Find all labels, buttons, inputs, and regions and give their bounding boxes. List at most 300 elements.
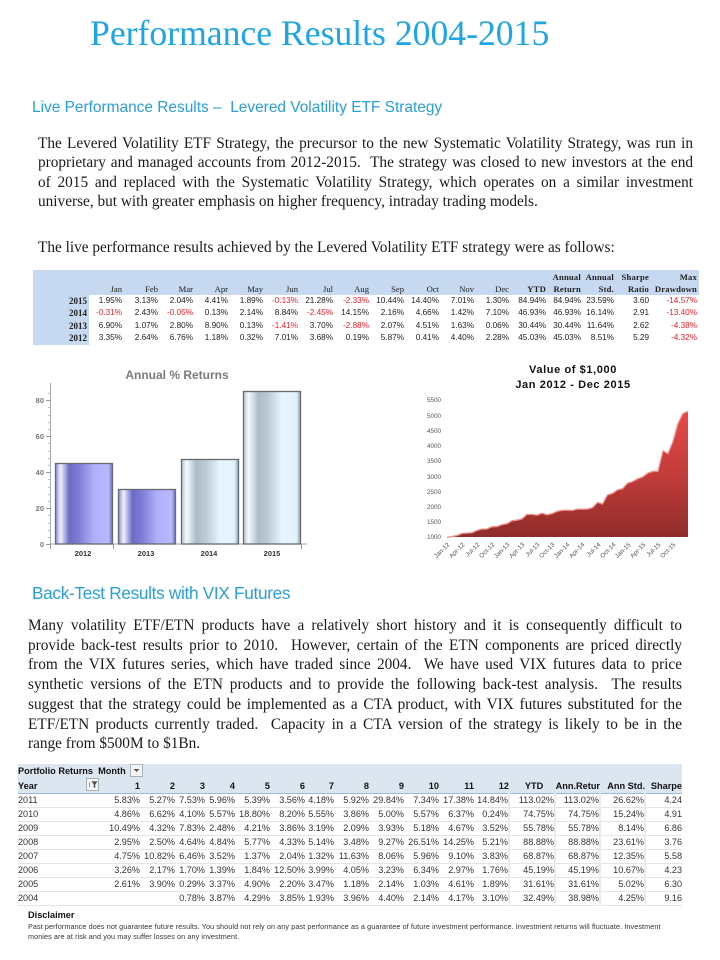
table: back-test portfolio returns: 2.17% xyxy=(149,865,175,875)
table: back-test portfolio returns: 7 xyxy=(329,780,334,790)
text block: strategy description: universe, but with greater emphasis on higher frequency, intraday trading models. xyxy=(38,193,538,210)
table: live monthly performance: 16.14% xyxy=(586,308,614,317)
table: back-test portfolio returns: Ann Std. xyxy=(607,780,645,790)
table: back-test portfolio returns: 8.20% xyxy=(279,809,305,819)
table: back-test portfolio returns: 7.53% xyxy=(179,795,205,805)
table: back-test portfolio returns: 7.34% xyxy=(413,795,439,805)
text block: back-test description: provide back-test results prior to 2010. However, certain of the ETN components are priced directly xyxy=(28,637,682,654)
table: back-test portfolio returns: 3.87% xyxy=(209,893,235,903)
table: back-test portfolio returns: 5.92% xyxy=(343,795,369,805)
text block: back-test description xyxy=(28,617,682,752)
table: back-test portfolio returns: 2 xyxy=(170,780,175,790)
table: back-test portfolio returns: 2008 xyxy=(18,837,38,847)
table: back-test portfolio returns: 6.46% xyxy=(179,851,205,861)
table: back-test portfolio returns: 3.23% xyxy=(378,865,404,875)
x-axis labels xyxy=(433,541,678,560)
table: back-test portfolio returns: 9.27% xyxy=(378,837,404,847)
x-axis labels: Jul-14 xyxy=(585,541,603,559)
table: back-test portfolio returns: 1.18% xyxy=(343,879,369,889)
text block: back-test description: synthetic versions of the ETN products and to provide the following back-test analysis. The results xyxy=(28,676,682,693)
table: live monthly performance: 2.91 xyxy=(633,308,649,317)
heading: live performance: Live Performance Results – Levered Volatility ETF Strategy xyxy=(32,99,442,116)
table: live monthly performance: -14.57% xyxy=(666,296,697,304)
table: back-test portfolio returns: 4.90% xyxy=(244,879,270,889)
table: back-test portfolio returns: 2005 xyxy=(18,879,38,889)
table: live monthly performance: 2013 xyxy=(69,321,87,331)
text block: back-test description: from the VIX futures series, which have traded since 2004. We have used VIX futures data to price xyxy=(28,656,682,673)
table: back-test portfolio returns: 38.98% xyxy=(568,893,599,903)
table: back-test portfolio returns: 6.30 xyxy=(664,879,682,889)
table: back-test portfolio returns: 6.62% xyxy=(149,809,175,819)
table: live monthly performance: YTD xyxy=(527,284,546,294)
x-axis labels: Jul-13 xyxy=(524,541,542,559)
table: back-test portfolio returns: 0.29% xyxy=(179,879,205,889)
table: back-test portfolio returns: 4.75% xyxy=(114,851,140,861)
table: back-test portfolio returns: 5.18% xyxy=(413,823,439,833)
y-axis labels xyxy=(427,397,441,541)
table: live monthly performance: Jan xyxy=(111,284,122,294)
table: back-test portfolio returns: 3.86% xyxy=(279,823,305,833)
table: back-test portfolio returns: 12 xyxy=(499,780,509,790)
table: back-test portfolio returns: 4.17% xyxy=(448,893,474,903)
y-axis labels xyxy=(36,396,44,549)
table: back-test portfolio returns: 3.19% xyxy=(308,823,334,833)
text block: strategy description: of 2015 and replaced with the Systematic Volatility Strategy, which operates on a similar investment xyxy=(38,174,693,191)
table: back-test portfolio returns: 3.48% xyxy=(343,837,369,847)
table: back-test portfolio returns: 10 xyxy=(429,780,439,790)
table: back-test portfolio returns: 3.47% xyxy=(308,879,334,889)
table: live monthly performance: 2012 xyxy=(69,333,87,343)
table: live monthly performance: Annual xyxy=(553,272,581,282)
x-axis labels: Jul-15 xyxy=(645,541,663,559)
table: live monthly performance: 2.04% xyxy=(170,296,193,304)
table: back-test portfolio returns: Sharpe xyxy=(651,780,682,790)
table: back-test portfolio returns: 10.49% xyxy=(109,823,140,833)
table: back-test portfolio returns: 2.04% xyxy=(279,851,305,861)
table: back-test portfolio returns: 5.57% xyxy=(209,809,235,819)
table: back-test portfolio returns: 8.06% xyxy=(378,851,404,861)
table: live monthly performance: 4.41% xyxy=(205,296,228,304)
table: live monthly performance xyxy=(33,270,699,345)
table: back-test portfolio returns: 5.00% xyxy=(378,809,404,819)
table: back-test portfolio returns: 3.86% xyxy=(343,809,369,819)
table: live monthly performance: Dec xyxy=(495,284,509,294)
table: back-test portfolio returns: 4.32% xyxy=(149,823,175,833)
table: back-test portfolio returns: 45.19% xyxy=(523,865,554,875)
table: live monthly performance: Jul xyxy=(323,284,333,294)
table: back-test portfolio returns: 74.75% xyxy=(568,809,599,819)
table: live monthly performance: Oct xyxy=(427,284,439,294)
table: back-test portfolio returns: 4.10% xyxy=(179,809,205,819)
table: back-test portfolio returns: 8 xyxy=(364,780,369,790)
table: live monthly performance: Sharpe xyxy=(622,272,649,282)
table: back-test portfolio returns: 3 xyxy=(200,780,205,790)
table: back-test portfolio returns: 3.52% xyxy=(209,851,235,861)
y-axis labels: 20 xyxy=(36,504,44,513)
table: back-test portfolio returns: 88.88% xyxy=(568,837,599,847)
text block: back-test description: suggest that the strategy could be implemented as a CTA product, with VIX futures substituted for the xyxy=(28,696,682,713)
table: live monthly performance: 6.90% xyxy=(99,321,122,330)
table: back-test portfolio returns: 3.96% xyxy=(343,893,369,903)
table: live monthly performance: 8.51% xyxy=(591,333,614,342)
table: back-test portfolio returns: 4.64% xyxy=(179,837,205,847)
icon: year filter button xyxy=(86,778,99,791)
x-axis labels: Apr-15 xyxy=(629,541,648,560)
table: live monthly performance: 45.03% xyxy=(553,333,581,342)
table: back-test portfolio returns: 2.09% xyxy=(343,823,369,833)
table: back-test portfolio returns: 2.14% xyxy=(378,879,404,889)
table: live monthly performance: 14.40% xyxy=(411,296,439,304)
table: live monthly performance: 4.66% xyxy=(416,308,439,317)
table: live monthly performance: Aug xyxy=(354,284,369,294)
table: live monthly performance: 23.59% xyxy=(586,296,614,304)
table: back-test portfolio returns: 3.83% xyxy=(482,851,508,861)
table: back-test portfolio returns: 9.16 xyxy=(664,893,682,903)
y-axis labels: 0 xyxy=(40,540,44,549)
axes xyxy=(46,383,307,549)
table: back-test portfolio returns: Year xyxy=(18,780,37,790)
table: live monthly performance: 1.63% xyxy=(451,321,474,330)
table: live monthly performance: 0.13% xyxy=(240,321,263,330)
table: live monthly performance: May xyxy=(247,284,263,294)
table: back-test portfolio returns: 2011 xyxy=(18,795,38,805)
table: back-test portfolio returns xyxy=(18,764,682,906)
table: back-test portfolio returns: 6.34% xyxy=(413,865,439,875)
x-axis labels: Apr-12 xyxy=(448,541,467,560)
bar chart: annual % returns xyxy=(36,368,307,558)
chart title xyxy=(515,364,631,391)
table: back-test portfolio returns: 3.76 xyxy=(664,837,682,847)
table: back-test portfolio returns: 7.83% xyxy=(179,823,205,833)
table: back-test portfolio returns: 4.29% xyxy=(244,893,270,903)
table: live monthly performance: Apr xyxy=(215,284,228,294)
table: back-test portfolio returns: 6 xyxy=(300,780,305,790)
table: live monthly performance: -2.33% xyxy=(343,296,369,304)
table: live monthly performance: 45.03% xyxy=(518,333,546,342)
table: back-test portfolio returns: 2.14% xyxy=(413,893,439,903)
x-axis labels: Oct-15 xyxy=(659,541,678,560)
table: back-test portfolio returns: 26.62% xyxy=(613,795,644,805)
table: live monthly performance: 2014 xyxy=(69,308,87,318)
table: live monthly performance: 2.43% xyxy=(135,308,158,317)
y-axis labels: 4500 xyxy=(427,428,441,435)
x-axis labels: Oct-12 xyxy=(478,541,497,560)
table: live monthly performance: Max xyxy=(680,272,697,282)
table: back-test portfolio returns: Portfolio Returns Month xyxy=(18,766,126,776)
table: back-test portfolio returns: 2009 xyxy=(18,823,38,833)
table: live monthly performance: 7.10% xyxy=(486,308,509,317)
table: live monthly performance: 2.16% xyxy=(381,308,404,317)
table: back-test portfolio returns: 1.89% xyxy=(482,879,508,889)
table: back-test portfolio returns: 113.02% xyxy=(519,795,554,805)
table: live monthly performance: 1.42% xyxy=(451,308,474,317)
title: Performance Results 2004-2015 xyxy=(90,13,549,53)
table: back-test portfolio returns: 12.50% xyxy=(274,865,305,875)
table: back-test portfolio returns: 32.49% xyxy=(523,893,554,903)
chart title: Value of $1,000 xyxy=(529,364,617,376)
table: back-test portfolio returns: 14.84% xyxy=(477,795,508,805)
table: back-test portfolio returns: 5 xyxy=(265,780,270,790)
text block: back-test description: range from $500M to $1Bn. xyxy=(28,735,200,752)
table: live monthly performance: 30.44% xyxy=(518,321,546,330)
x-axis labels: Oct-14 xyxy=(599,541,618,560)
table: live monthly performance: Sep xyxy=(391,284,404,294)
bars xyxy=(56,392,300,544)
table: live monthly performance: 1.18% xyxy=(205,333,228,342)
table: back-test portfolio returns: 5.39% xyxy=(244,795,270,805)
table: back-test portfolio returns: 6.86 xyxy=(664,823,682,833)
disclaimer: monies are at risk and you may suffer losses on any investment. xyxy=(28,932,239,941)
table: live monthly performance: 14.15% xyxy=(341,308,369,317)
table: back-test portfolio returns: 5.83% xyxy=(114,795,140,805)
table: live monthly performance: 7.01% xyxy=(451,296,474,304)
table: live monthly performance: 0.06% xyxy=(486,321,509,330)
table: live monthly performance: 2015 xyxy=(69,296,87,306)
x-axis labels: 2013 xyxy=(138,549,154,558)
table: back-test portfolio returns: 3.26% xyxy=(114,865,140,875)
table: live monthly performance: Feb xyxy=(145,284,158,294)
y-axis labels: 3000 xyxy=(427,474,441,481)
table: back-test portfolio returns: 1.84% xyxy=(244,865,270,875)
table: back-test portfolio returns: 45.19% xyxy=(568,865,599,875)
table: back-test portfolio returns: 4.23 xyxy=(664,865,682,875)
y-axis labels: 5500 xyxy=(427,397,441,404)
y-axis labels: 60 xyxy=(36,432,44,441)
table: back-test portfolio returns: 4.86% xyxy=(114,809,140,819)
table: live monthly performance: 0.19% xyxy=(346,333,369,342)
table: live monthly performance: -1.41% xyxy=(272,321,298,330)
table: back-test portfolio returns: 3.90% xyxy=(149,879,175,889)
table: back-test portfolio returns: YTD xyxy=(525,780,543,790)
table: back-test portfolio returns: 68.87% xyxy=(523,851,554,861)
table: back-test portfolio returns: 4.67% xyxy=(448,823,474,833)
table: live monthly performance: -4.38% xyxy=(671,321,697,330)
table: back-test portfolio returns: 2.97% xyxy=(448,865,474,875)
table: back-test portfolio returns: 4.24 xyxy=(664,795,682,805)
table: back-test portfolio returns: 3.10% xyxy=(482,893,508,903)
y-axis labels: 4000 xyxy=(427,443,441,450)
disclaimer: Past performance does not guarantee future results. You should not rely on any past performance as a guarantee of future investment performance. Investment returns will fluctuate. Investment xyxy=(28,922,661,931)
table: back-test portfolio returns: 5.96% xyxy=(413,851,439,861)
table: live monthly performance: 2.64% xyxy=(135,333,158,342)
table: live monthly performance: -0.31% xyxy=(96,308,122,317)
chart title: Annual % Returns xyxy=(125,368,229,382)
x-axis labels: 2014 xyxy=(201,549,218,558)
table: back-test portfolio returns: 4.40% xyxy=(378,893,404,903)
table: live monthly performance: 7.01% xyxy=(275,333,298,342)
table: live monthly performance: 1.95% xyxy=(99,296,122,304)
table: live monthly performance: 46.93% xyxy=(553,308,581,317)
table: back-test portfolio returns: 3.93% xyxy=(378,823,404,833)
table: back-test portfolio returns: 9.10% xyxy=(448,851,474,861)
heading: back-test results: Back-Test Results with VIX Futures xyxy=(32,583,290,603)
table: back-test portfolio returns: 2006 xyxy=(18,865,38,875)
x-axis labels: Jan-13 xyxy=(493,541,512,560)
x-axis labels: Oct-13 xyxy=(538,541,557,560)
table: back-test portfolio returns: 4 xyxy=(230,780,235,790)
table: back-test portfolio returns: 10.82% xyxy=(144,851,175,861)
table: live monthly performance: 2.80% xyxy=(170,321,193,330)
table: back-test portfolio returns: 3.85% xyxy=(279,893,305,903)
table: live monthly performance: 2.28% xyxy=(486,333,509,342)
value area xyxy=(447,411,688,538)
table: live monthly performance: 2.14% xyxy=(240,308,263,317)
y-axis labels: 1000 xyxy=(427,534,441,541)
chart title: Jan 2012 - Dec 2015 xyxy=(515,379,631,391)
text block: back-test description: ETF/ETN products currently traded. Capacity in a CTA version of the strategy is likely to be in the xyxy=(28,716,682,733)
table: live monthly performance: 84.94% xyxy=(553,296,581,304)
table: live monthly performance: 3.68% xyxy=(310,333,333,342)
table: live monthly performance: 4.40% xyxy=(451,333,474,342)
table: back-test portfolio returns: 55.78% xyxy=(568,823,599,833)
table: live monthly performance: -0.05% xyxy=(167,308,193,317)
table: back-test portfolio returns: 4.25% xyxy=(618,893,644,903)
table: live monthly performance: -13.40% xyxy=(666,308,697,317)
table: back-test portfolio returns: 2010 xyxy=(18,809,38,819)
table: back-test portfolio returns: 1.03% xyxy=(413,879,439,889)
table: back-test portfolio returns: 5.55% xyxy=(308,809,334,819)
y-axis labels: 2500 xyxy=(427,489,441,496)
table: back-test portfolio returns: Ann.Retur xyxy=(556,780,600,790)
table: back-test portfolio returns: 12.35% xyxy=(613,851,644,861)
table: live monthly performance: 3.35% xyxy=(99,333,122,342)
x-axis labels: Jul-12 xyxy=(464,541,482,559)
table: back-test portfolio returns: 5.21% xyxy=(482,837,508,847)
x-axis labels xyxy=(75,549,280,558)
table: live monthly performance: 2.62 xyxy=(633,321,649,330)
x-axis labels: Jan-14 xyxy=(553,541,572,560)
x-axis labels: Jan-15 xyxy=(614,541,633,560)
table: live monthly performance: 46.93% xyxy=(518,308,546,317)
table: back-test portfolio returns: 3.37% xyxy=(209,879,235,889)
table: back-test portfolio returns: 5.96% xyxy=(209,795,235,805)
y-axis labels: 5000 xyxy=(427,413,441,420)
text block: strategy description: The Levered Volatility ETF Strategy, the precursor to the new Systematic Volatility Strategy, was run in xyxy=(38,135,693,152)
table: live monthly performance: Jun xyxy=(286,284,298,294)
y-axis labels: 3500 xyxy=(427,458,441,465)
table: back-test portfolio returns: 4.05% xyxy=(343,865,369,875)
table: back-test portfolio returns: 4.21% xyxy=(244,823,270,833)
table: back-test portfolio returns: 15.24% xyxy=(613,809,644,819)
table: live monthly performance: Mar xyxy=(179,284,193,294)
table: live monthly performance: 30.44% xyxy=(553,321,581,330)
table: back-test portfolio returns: 5.27% xyxy=(149,795,175,805)
table: back-test portfolio returns: 2.95% xyxy=(114,837,140,847)
table: back-test portfolio returns: 3.56% xyxy=(279,795,305,805)
table: back-test portfolio returns: 18.80% xyxy=(239,809,270,819)
icon: month filter dropdown xyxy=(130,764,143,777)
table: back-test portfolio returns: 88.88% xyxy=(523,837,554,847)
table: live monthly performance: 3.60 xyxy=(633,296,649,304)
table: back-test portfolio returns: 2.48% xyxy=(209,823,235,833)
text block: live results intro: The live performance results achieved by the Levered Volatility ETF strategy were as follows: xyxy=(38,239,615,256)
table: live monthly performance: 1.07% xyxy=(135,321,158,330)
table: live monthly performance: 2.07% xyxy=(381,321,404,330)
table: live monthly performance: 1.89% xyxy=(240,296,263,304)
x-axis labels: 2015 xyxy=(264,549,280,558)
y-axis labels: 40 xyxy=(36,468,44,477)
table: live monthly performance: Std. xyxy=(599,284,614,294)
y-axis labels: 80 xyxy=(36,396,44,405)
table: back-test portfolio returns: 11.63% xyxy=(339,851,369,861)
table: back-test portfolio returns: 17.38% xyxy=(443,795,474,805)
x-axis labels: Apr-13 xyxy=(508,541,527,560)
table: back-test portfolio returns: 26.51% xyxy=(408,837,439,847)
table: live monthly performance: 11.64% xyxy=(587,321,614,330)
table: back-test portfolio returns: 68.87% xyxy=(568,851,599,861)
table: back-test portfolio returns: 1.37% xyxy=(244,851,270,861)
table: back-test portfolio returns: 2.20% xyxy=(279,879,305,889)
table: back-test portfolio returns: 2.61% xyxy=(114,879,140,889)
table: back-test portfolio returns: 2004 xyxy=(18,893,38,903)
table: back-test portfolio returns: 14.25% xyxy=(443,837,474,847)
table: back-test portfolio returns: 11 xyxy=(464,780,474,790)
text block: back-test description: Many volatility ETF/ETN products have a relatively short history and it is consequently difficult to xyxy=(28,617,682,634)
disclaimer xyxy=(28,910,661,941)
table: live monthly performance: 5.87% xyxy=(381,333,404,342)
table: back-test portfolio returns: 5.02% xyxy=(618,879,644,889)
table: live monthly performance: -2.88% xyxy=(343,321,369,330)
table: live monthly performance: 8.90% xyxy=(205,321,228,330)
table: back-test portfolio returns: 5.14% xyxy=(308,837,334,847)
table: back-test portfolio returns: 5.58 xyxy=(664,851,682,861)
table: back-test portfolio returns: 1.76% xyxy=(482,865,508,875)
table: back-test portfolio returns: 5.77% xyxy=(244,837,270,847)
y-axis labels: 2000 xyxy=(427,504,441,511)
table: back-test portfolio returns: 1 xyxy=(135,780,140,790)
table: back-test portfolio returns: 31.61% xyxy=(523,879,554,889)
table: back-test portfolio returns: 29.84% xyxy=(373,795,404,805)
y-axis labels: 1500 xyxy=(427,519,441,526)
table: live monthly performance: 0.13% xyxy=(205,308,228,317)
table: live monthly performance: Nov xyxy=(459,284,474,294)
table: live monthly performance: -4.32% xyxy=(671,333,697,342)
table: back-test portfolio returns: 4.91 xyxy=(664,809,682,819)
text block: strategy description xyxy=(38,135,693,210)
table: live monthly performance: 84.94% xyxy=(518,296,546,304)
table: back-test portfolio returns: 31.61% xyxy=(568,879,599,889)
table: back-test portfolio returns: 1.93% xyxy=(308,893,334,903)
table: back-test portfolio returns: 0.24% xyxy=(482,809,508,819)
table: back-test portfolio returns: 0.78% xyxy=(179,893,205,903)
table: live monthly performance: Annual xyxy=(586,272,614,282)
table: back-test portfolio returns: 2007 xyxy=(18,851,38,861)
table: live monthly performance: 0.32% xyxy=(240,333,263,342)
table: live monthly performance: 10.44% xyxy=(376,296,404,304)
text block: strategy description: proprietary and managed accounts from 2012-2015. The strategy was closed to new investors at the end xyxy=(38,154,693,171)
table: back-test portfolio returns: 3.99% xyxy=(308,865,334,875)
table: back-test portfolio returns: 4.61% xyxy=(448,879,474,889)
x-axis labels: 2012 xyxy=(75,549,91,558)
area chart: value of $1,000 xyxy=(427,364,688,560)
table: back-test portfolio returns: 2.50% xyxy=(149,837,175,847)
table: back-test portfolio returns: 4.18% xyxy=(308,795,334,805)
table: back-test portfolio returns: 23.61% xyxy=(613,837,644,847)
table: live monthly performance: 3.70% xyxy=(310,321,333,330)
table: back-test portfolio returns: 10.67% xyxy=(613,865,644,875)
x-axis labels: Apr-14 xyxy=(568,541,587,560)
table: live monthly performance: 0.41% xyxy=(416,333,439,342)
table: back-test portfolio returns: 4.33% xyxy=(279,837,305,847)
table: live monthly performance: Drawdown xyxy=(655,284,697,294)
disclaimer: Disclaimer xyxy=(28,910,74,920)
table: live monthly performance: 6.76% xyxy=(170,333,193,342)
table: back-test portfolio returns: 3.52% xyxy=(482,823,508,833)
table: live monthly performance: Ratio xyxy=(628,284,649,294)
table: live monthly performance: 8.84% xyxy=(275,308,298,317)
table: live monthly performance: -0.13% xyxy=(272,296,298,304)
table: live monthly performance: 5.29 xyxy=(633,333,649,342)
